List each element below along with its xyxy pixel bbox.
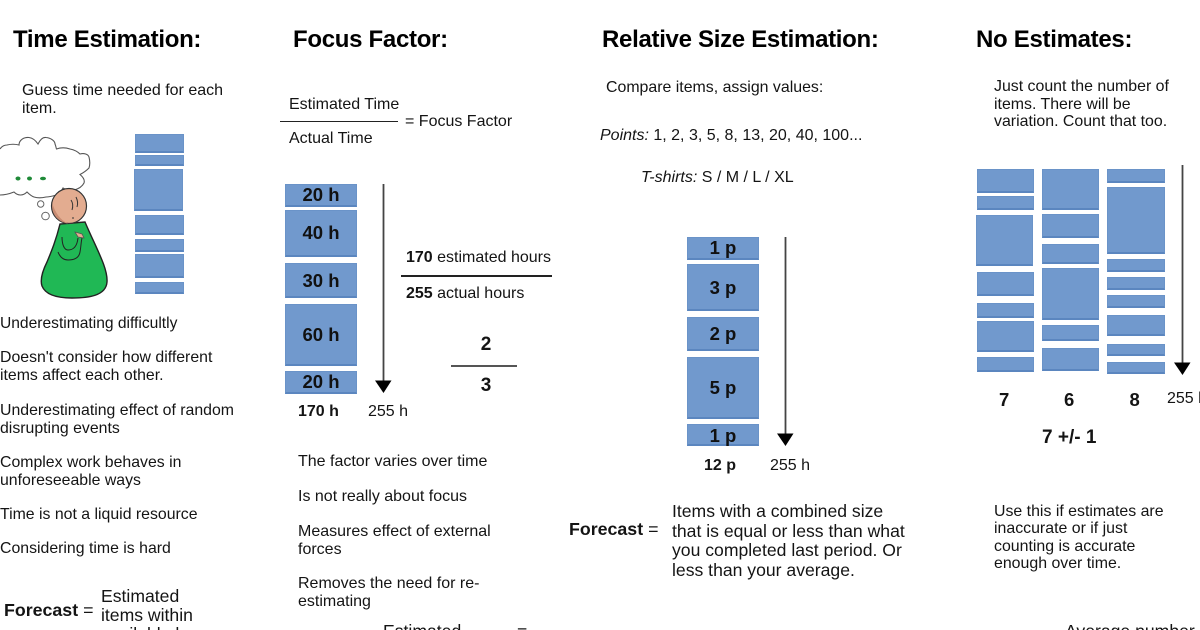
formula: focus factor: Actual Time (289, 130, 373, 147)
blocks: focus factor stack (285, 184, 357, 394)
text: just count: items. There will be (994, 96, 1131, 112)
labels: relative size totals (704, 457, 810, 474)
labels: focus totals: 255 h (368, 403, 408, 420)
blocks: focus factor stack: 60 h (302, 324, 340, 345)
blocks: relative size stack: 1 p (710, 425, 736, 446)
illustration: thinking person in green robe (0, 136, 108, 299)
labels: focus totals: 170 h (298, 403, 339, 420)
labels: column counts: 7 (999, 389, 1009, 410)
text: when to use: inaccurate or if just (994, 520, 1127, 537)
text: time estimation problems: Underestimating effect of random (0, 402, 234, 419)
text: time estimation problems: Doesn't consider how different (0, 349, 212, 366)
text: time estimation problems: items affect each other. (0, 367, 164, 384)
text: time estimation problems: Underestimating difficultly (0, 315, 177, 332)
labels: relative size totals: 255 h (770, 457, 810, 474)
fraction: two thirds: 3 (481, 375, 491, 396)
blocks: no estimates column 3 (1107, 169, 1165, 374)
text: just count: variation. Count that too. (994, 113, 1167, 130)
label: average count: 7 +/- 1 (1042, 427, 1096, 448)
blocks: no estimates column 2 (1042, 169, 1099, 371)
text: when to use: counting is accurate (994, 538, 1135, 554)
forecast: time estimation: Estimated (101, 586, 179, 606)
forecast: relative size (569, 501, 905, 580)
text: time estimation problems: Complex work behaves in (0, 454, 181, 471)
text: time estimation problems: Time is not a liquid resource (0, 506, 198, 523)
heading: Relative Size Estimation: Relative Size Estimation: (602, 26, 879, 53)
heading: Focus Factor: Focus Factor: (293, 26, 448, 53)
text: time estimation problems: disrupting events (0, 420, 120, 437)
text: focus factor notes: The factor varies over time (298, 453, 487, 470)
labels: focus totals (298, 403, 408, 420)
blocks: focus factor stack: 20 h (302, 184, 340, 205)
heading: Time Estimation: Time Estimation: (13, 26, 201, 53)
text: compare items: Compare items, assign values: (606, 79, 823, 96)
blocks: time estimation stack (134, 134, 184, 294)
labels: column counts: 8 (1130, 389, 1140, 410)
blocks: relative size stack: 1 p (710, 237, 736, 258)
blocks: relative size stack: 2 p (710, 323, 736, 344)
text: time estimation problems: unforeseeable ways (0, 472, 141, 489)
text: time estimation problems (0, 315, 234, 557)
forecast: time estimation: Forecast = (4, 600, 93, 620)
text: just count (994, 78, 1169, 130)
calculation: estimated over actual: 170 estimated hours (406, 249, 551, 266)
text: just count: Just count the number of (994, 78, 1169, 95)
fraction: two thirds (451, 334, 517, 396)
formula: focus factor (280, 96, 512, 147)
forecast: relative size: less than your average. (672, 560, 855, 580)
text: focus factor notes: Measures effect of external (298, 523, 491, 540)
fraction: two thirds: 2 (481, 334, 491, 355)
forecast: focus factor (cropped) (383, 621, 527, 630)
calculation: estimated over actual: 255 actual hours (406, 285, 524, 302)
text: when to use: enough over time. (994, 555, 1121, 572)
heading: No Estimates: No Estimates: (976, 26, 1132, 53)
forecast: relative size: Items with a combined size (672, 501, 883, 521)
forecast: relative size: that is equal or less than what (672, 520, 905, 540)
text: focus factor notes: Is not really about focus (298, 488, 467, 505)
labels: column counts: 6 (1064, 389, 1074, 410)
blocks: relative size stack: 3 p (710, 277, 736, 298)
text: points scale: Points: 1, 2, 3, 5, 8, 13, 20, 40, 100... (600, 127, 862, 144)
forecast: relative size: Forecast = (569, 519, 658, 539)
forecast: time estimation (4, 586, 219, 630)
formula: focus factor: = Focus Factor (405, 113, 512, 130)
blocks: focus factor stack: 40 h (302, 222, 340, 243)
text: when to use (994, 502, 1164, 572)
blocks: focus factor stack: 20 h (302, 371, 340, 392)
text: guess time (22, 82, 223, 117)
text: guess time: item. (22, 100, 57, 117)
text: guess time: Guess time needed for each (22, 82, 223, 99)
blocks: no estimates column 1 (976, 169, 1034, 372)
text: focus factor notes: forces (298, 541, 342, 558)
calculation: estimated over actual (401, 249, 552, 302)
blocks: focus factor stack: 30 h (302, 270, 340, 291)
blocks: relative size stack (687, 237, 759, 446)
forecast: relative size: you completed last period. Or (672, 540, 902, 560)
text: when to use: Use this if estimates are (994, 502, 1164, 520)
text: focus factor notes: estimating (298, 593, 371, 610)
labels: column counts (999, 389, 1200, 410)
text: focus factor notes (298, 453, 491, 610)
text: time estimation problems: Considering time is hard (0, 540, 171, 557)
labels: relative size totals: 12 p (704, 457, 736, 474)
forecast: time estimation: items within (101, 605, 193, 625)
text: t-shirt scale: T-shirts: S / M / L / XL (641, 169, 794, 186)
blocks: relative size stack: 5 p (710, 377, 736, 398)
formula: focus factor: Estimated Time (289, 96, 399, 113)
text: focus factor notes: Removes the need for re- (298, 575, 479, 592)
